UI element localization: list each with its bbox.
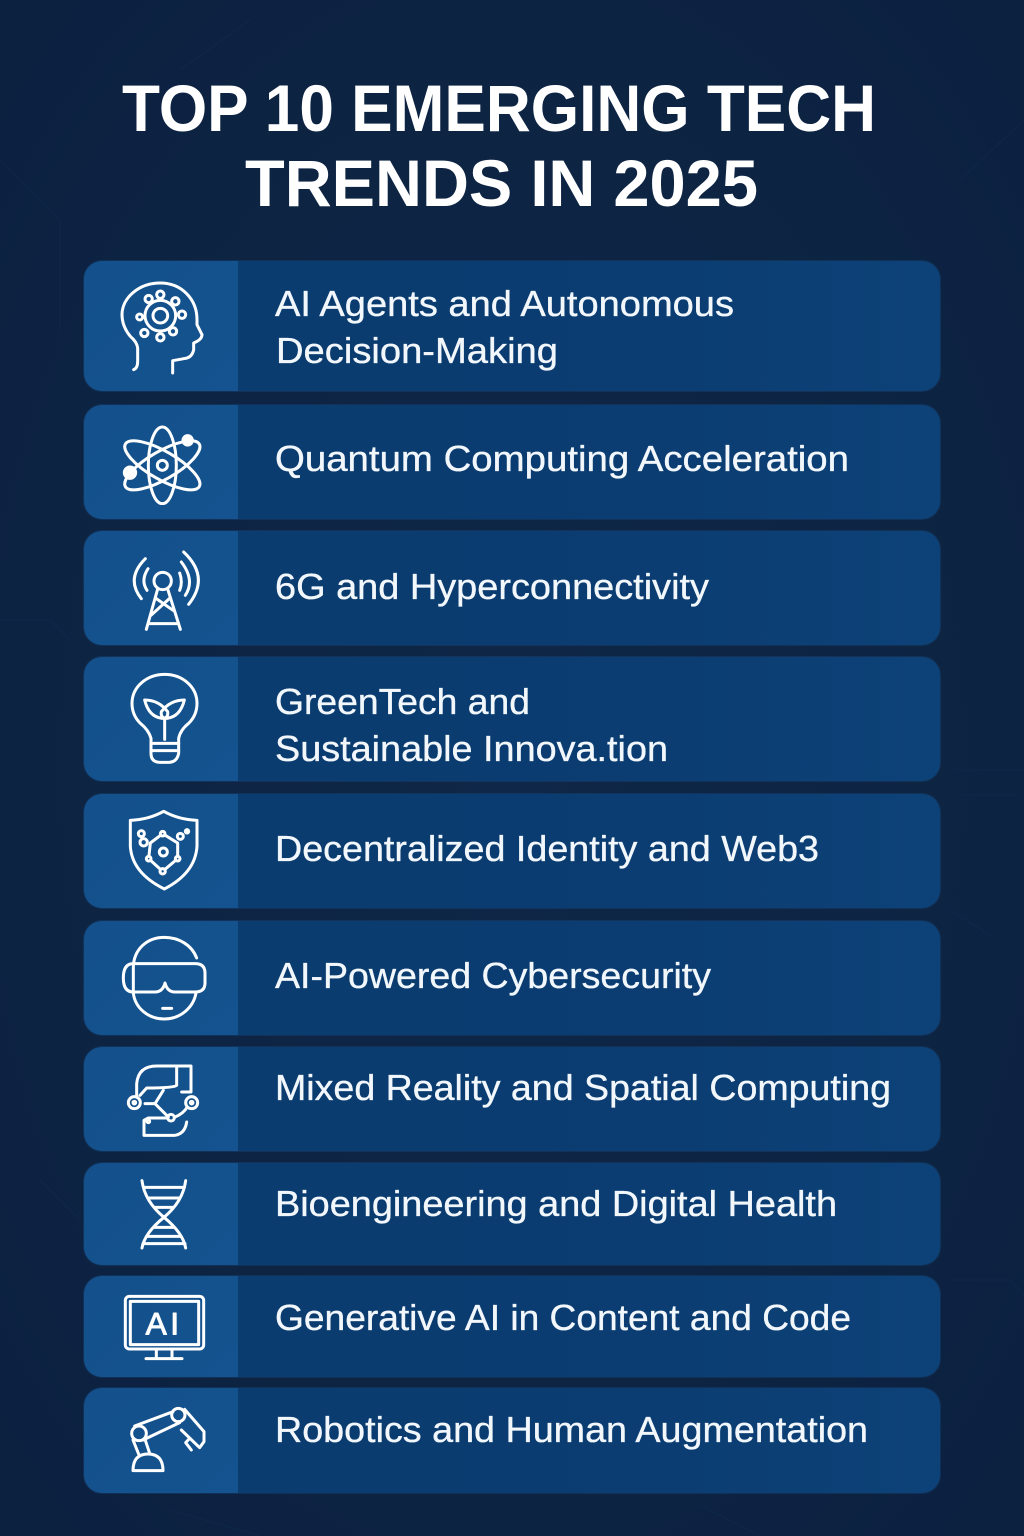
icon: atom (122, 426, 202, 505)
icon: DNA helix (140, 1179, 188, 1250)
panel: Mixed Reality and Spatial Computing (84, 1047, 940, 1151)
text (274, 283, 734, 371)
text: Decision-Making (276, 330, 558, 371)
icon: light bulb with leaves (130, 672, 198, 764)
text: Mixed Reality and Spatial Computing (275, 1067, 891, 1108)
icon: shield with network (128, 810, 198, 890)
text: GreenTech and (275, 681, 530, 722)
icon: head with VR goggles (122, 936, 206, 1020)
text: Bioengineering and Digital Health (275, 1183, 837, 1224)
text: Sustainable Innova.tion (275, 728, 668, 769)
icon: circuit device (126, 1064, 200, 1137)
title: TRENDS IN 2025 (245, 146, 758, 220)
icon: AI monitor: AI (145, 1306, 179, 1342)
title (122, 71, 876, 220)
icon: robotic arm (130, 1406, 206, 1472)
text (275, 681, 668, 769)
icon: head with gear (120, 282, 204, 374)
panel: 6G and Hyperconnectivity (84, 531, 940, 645)
panel: Quantum Computing Acceleration (84, 405, 940, 519)
panel: AI-Powered Cybersecurity (84, 921, 940, 1035)
text: Quantum Computing Acceleration (275, 438, 849, 479)
text: AI-Powered Cybersecurity (275, 955, 711, 996)
panel: Robotics and Human Augmentation (84, 1388, 940, 1493)
text: 6G and Hyperconnectivity (275, 566, 709, 607)
text: Decentralized Identity and Web3 (275, 828, 819, 869)
panel: AI Agents and Autonomous Decision-Making (84, 261, 940, 391)
panel: Generative AI in Content and Code (84, 1276, 940, 1377)
text: Robotics and Human Augmentation (275, 1409, 868, 1450)
panel: GreenTech and Sustainable Innovation (84, 657, 940, 781)
text: AI Agents and Autonomous (275, 283, 734, 324)
icon: antenna tower (132, 550, 200, 631)
text: Generative AI in Content and Code (275, 1297, 851, 1338)
panel: Decentralized Identity and Web3 (84, 794, 940, 908)
panel: Bioengineering and Digital Health (84, 1163, 940, 1265)
title: TOP 10 EMERGING TECH (122, 71, 876, 145)
icon: AI monitor (124, 1294, 206, 1360)
